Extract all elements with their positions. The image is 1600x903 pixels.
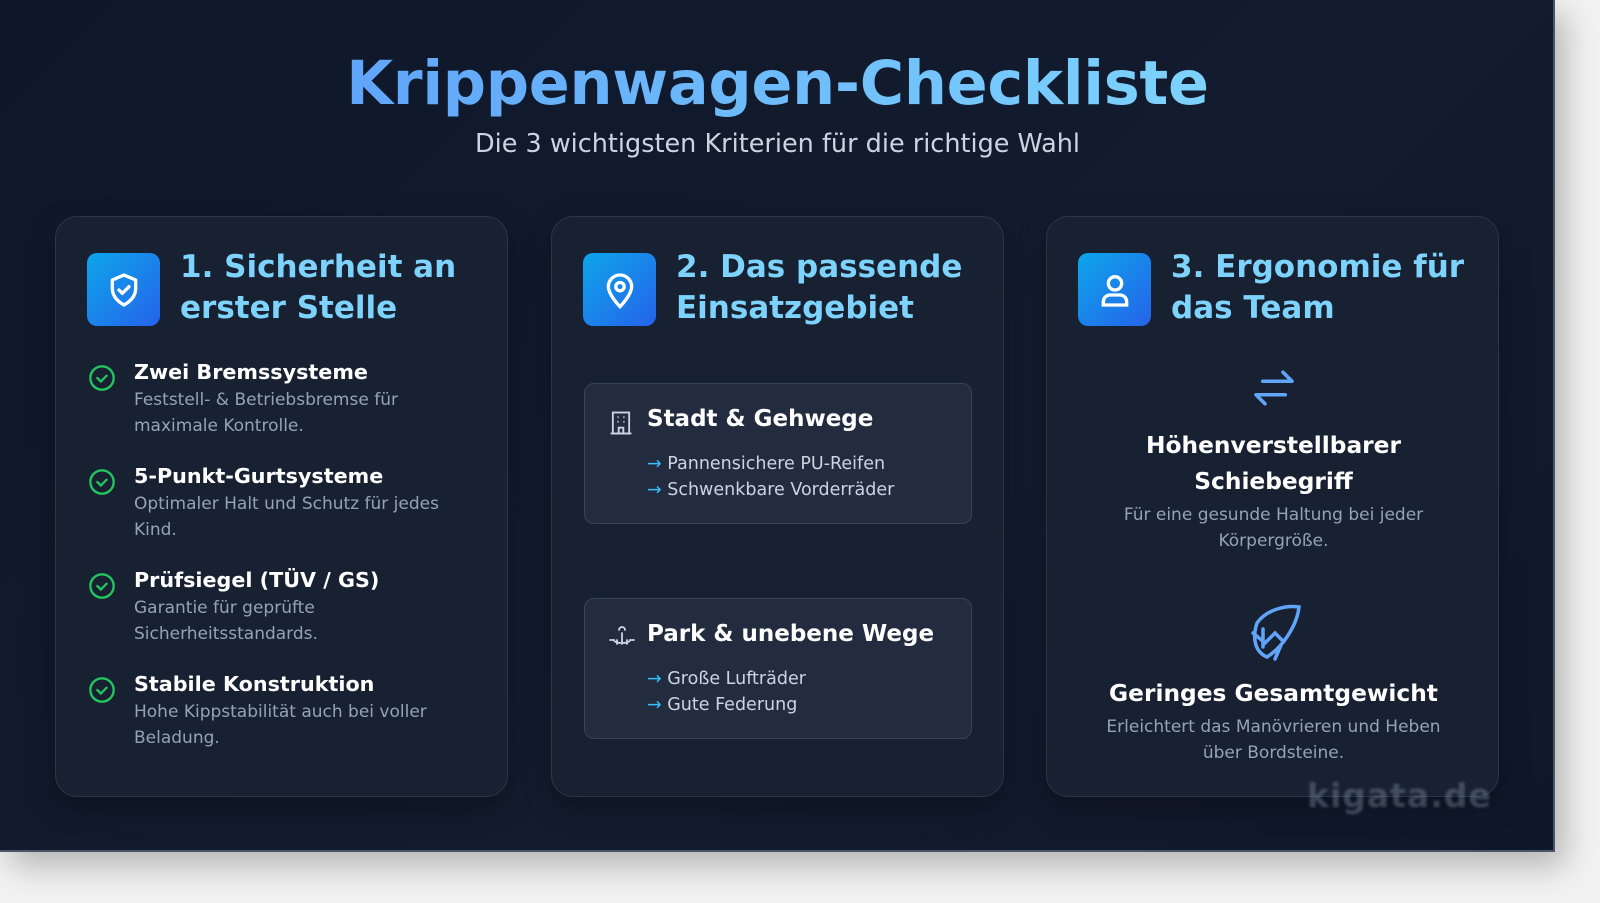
heading: erster Stelle bbox=[180, 290, 397, 326]
panel: Sicherheit: Garantie für geprüfte bbox=[134, 598, 315, 618]
item: Gurtsysteme bbox=[89, 464, 439, 540]
sub-box: Stadt: → Schwenkbare Vorderräder bbox=[647, 480, 894, 500]
icon: map pin bbox=[583, 253, 656, 326]
panel: Sicherheit: Beladung. bbox=[134, 728, 220, 748]
block: Gewicht: Geringes Gesamtgewicht bbox=[1109, 680, 1438, 707]
icon: shield bbox=[87, 253, 160, 326]
block: Schiebegriff: Körpergröße. bbox=[1218, 531, 1328, 551]
heading bbox=[180, 249, 456, 326]
sub-box: Stadt: Stadt & Gehwege bbox=[647, 406, 873, 432]
item: Bremssysteme bbox=[89, 360, 398, 436]
icon: park bbox=[609, 626, 635, 645]
heading: 2. Das passende bbox=[676, 249, 962, 285]
sub-box: Park: → Gute Federung bbox=[647, 695, 797, 715]
panel: Sicherheit: Optimaler Halt und Schutz für jedes bbox=[134, 494, 439, 514]
subtitle: Die 3 wichtigsten Kriterien für die richtige Wahl bbox=[475, 129, 1080, 159]
heading: 1. Sicherheit an bbox=[180, 249, 456, 285]
heading: das Team bbox=[1171, 290, 1335, 326]
heading bbox=[1171, 249, 1464, 326]
panel: Sicherheit: 5-Punkt-Gurtsysteme bbox=[134, 464, 383, 488]
block: Gewicht: über Bordsteine. bbox=[1203, 743, 1344, 763]
heading: 3. Ergonomie für bbox=[1171, 249, 1464, 285]
watermark: kigata.de bbox=[1307, 776, 1492, 815]
heading bbox=[676, 249, 962, 326]
panel: Sicherheit: Sicherheitsstandards. bbox=[134, 624, 318, 644]
icon: feather bbox=[1251, 604, 1301, 661]
sub-box: Stadt bbox=[584, 383, 972, 524]
sub-box: Park: Park & unebene Wege bbox=[647, 621, 934, 647]
sub-box: Park bbox=[584, 598, 972, 739]
block: Schiebegriff: Schiebegriff bbox=[1194, 468, 1353, 495]
panel: Sicherheit: Stabile Konstruktion bbox=[134, 672, 374, 696]
icon: arrows bbox=[1254, 370, 1294, 406]
panel: Ergonomie bbox=[1046, 216, 1499, 797]
block: Gewicht: Erleichtert das Manövrieren und Heben bbox=[1106, 717, 1441, 737]
block: Gewicht bbox=[1106, 680, 1441, 763]
block: Schiebegriff: Für eine gesunde Haltung bei jeder bbox=[1124, 505, 1423, 525]
icon: user bbox=[1078, 253, 1151, 326]
icon: building bbox=[610, 412, 632, 434]
item: Prüfsiegel bbox=[89, 568, 379, 644]
sub-box: Stadt: → Pannensichere PU-Reifen bbox=[647, 454, 885, 474]
sub-box: Park: → Große Lufträder bbox=[647, 669, 806, 689]
panel: Sicherheit: Prüfsiegel (TÜV / GS) bbox=[134, 568, 379, 592]
block: Schiebegriff: Höhenverstellbarer bbox=[1146, 432, 1401, 459]
item: Konstruktion bbox=[89, 672, 427, 748]
block: Schiebegriff bbox=[1124, 432, 1424, 551]
panel: Sicherheit: Zwei Bremssysteme bbox=[134, 360, 368, 384]
panel: Sicherheit bbox=[55, 216, 508, 797]
title: Krippenwagen-Checkliste bbox=[346, 49, 1209, 119]
panel: Sicherheit: Kind. bbox=[134, 520, 177, 540]
panel: Sicherheit: Feststell- & Betriebsbremse für maximale Kontrolle. bbox=[134, 390, 398, 436]
heading: Einsatzgebiet bbox=[676, 290, 914, 326]
panel: Sicherheit: Hohe Kippstabilität auch bei voller bbox=[134, 702, 427, 722]
panel: Einsatzgebiet bbox=[551, 216, 1004, 797]
